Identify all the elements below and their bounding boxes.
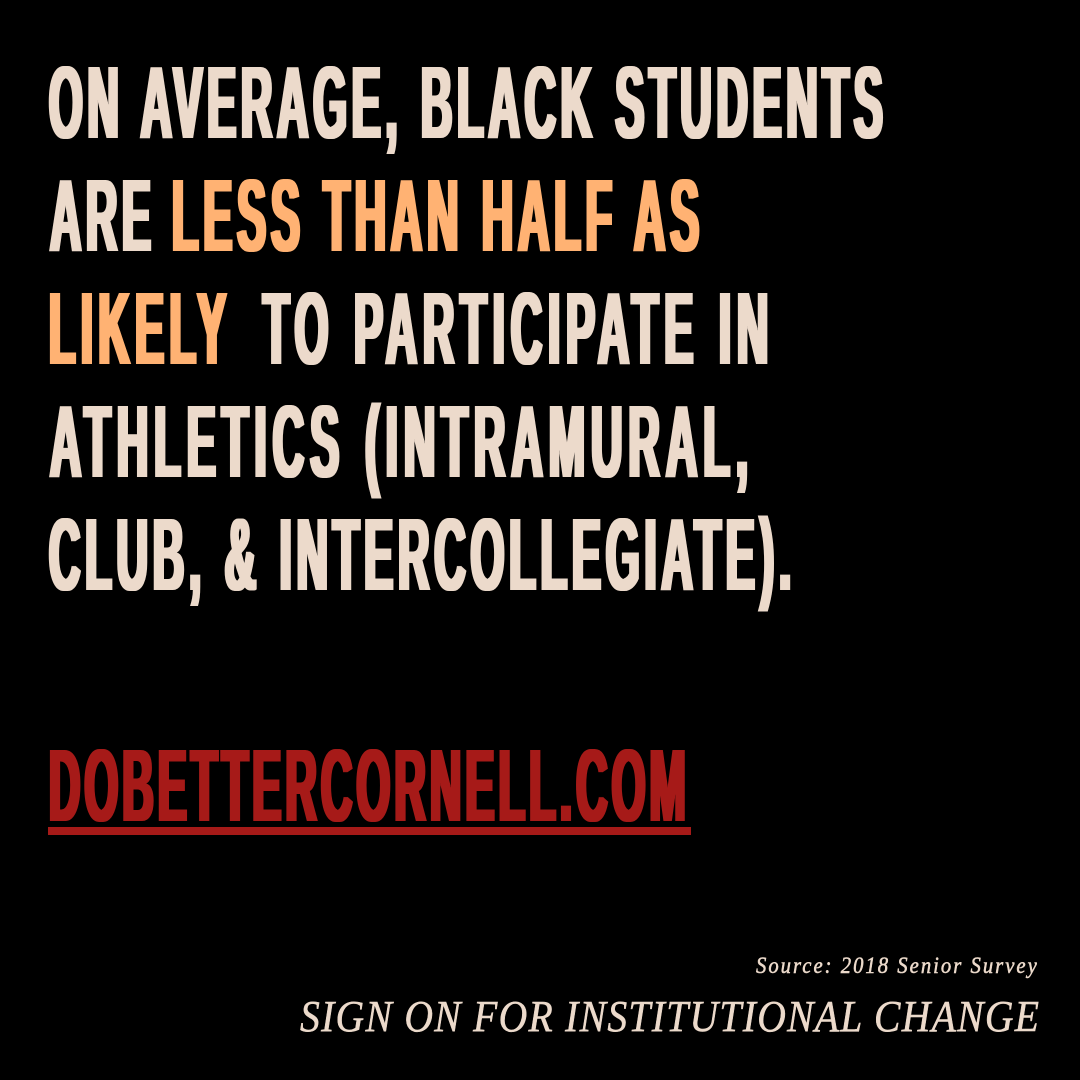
headline line 5: CLUB, & INTERCOLLEGIATE). xyxy=(49,496,791,612)
headline line 1: ON AVERAGE, BLACK STUDENTS xyxy=(49,44,883,160)
headline line 2: LESS THAN HALF AS xyxy=(172,157,699,273)
headline line 3: TO PARTICIPATE IN xyxy=(263,270,768,386)
source note: Source: 2018 Senior Survey xyxy=(756,953,1037,978)
headline line 4: ATHLETICS (INTRAMURAL, xyxy=(50,383,748,499)
headline line 3: LIKELY xyxy=(49,270,226,386)
website link with underline: DOBETTERCORNELL.COM xyxy=(49,727,686,843)
headline line 2: ARE xyxy=(50,157,151,273)
headline statement xyxy=(49,44,883,612)
call to action: SIGN ON FOR INSTITUTIONAL CHANGE xyxy=(300,993,1039,1042)
